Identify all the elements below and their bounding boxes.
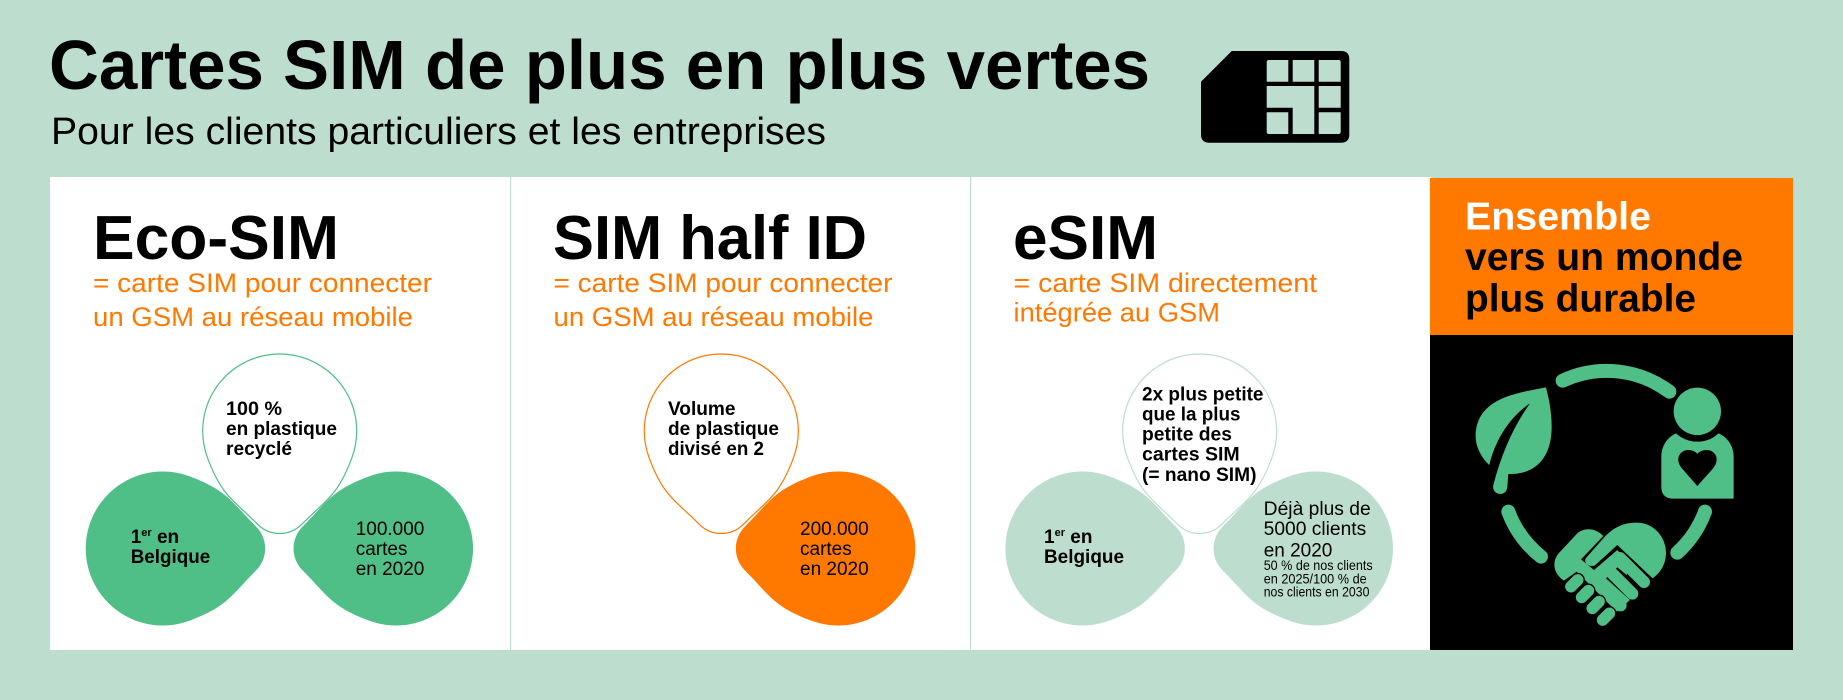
icon: handshake (1554, 523, 1666, 620)
drop: first in Belgium: er (141, 527, 152, 539)
drop: 5000 clients: 50 % de nos clients (1264, 557, 1373, 573)
drop: 100.000 cards: 100.000 (356, 519, 424, 540)
drop: 5000 clients: nos clients en 2030 (1264, 584, 1370, 600)
drop: 5000 clients: en 2020 (1264, 540, 1332, 562)
icon: person with heart (1661, 388, 1734, 499)
definition: SIM half ID (554, 268, 893, 332)
drop: first in Belgium: 1 (131, 527, 141, 548)
heading: eSIM: eSIM (1013, 204, 1158, 273)
drop: plastic volume (644, 354, 798, 533)
drop: first in Belgium (86, 472, 265, 626)
heading: SIM half ID: SIM half ID (553, 204, 867, 273)
drop: plastic volume: divisé en 2 (668, 439, 764, 460)
drop: smaller than nano SIM: que la plus (1142, 405, 1240, 426)
banner: together towards a more sustainable world: Ensemble (1465, 195, 1651, 238)
drop: first in Belgium: en (1065, 527, 1092, 548)
drop: recycled plastic (203, 354, 357, 533)
drop: 200.000 cards: en 2020 (800, 559, 869, 580)
banner: together towards a more sustainable world: plus durable (1465, 278, 1696, 321)
ring arcs (1508, 371, 1705, 557)
drop: smaller than nano SIM: petite des (1142, 425, 1232, 446)
banner: together towards a more sustainable world (1430, 178, 1793, 335)
panel: Ensemble (1430, 178, 1793, 650)
drop: 5000 clients (1214, 472, 1393, 626)
icon: SIM card (1201, 51, 1349, 143)
drop: 100.000 cards: cartes (356, 539, 407, 560)
heading: Eco-SIM: Eco-SIM (93, 204, 339, 273)
drop: recycled plastic: recyclé (226, 439, 292, 460)
drop: smaller than nano SIM: cartes SIM (1142, 445, 1240, 466)
drop: smaller than nano SIM: 2x plus petite (1142, 385, 1264, 406)
drop: first in Belgium: er (1055, 527, 1066, 539)
panel: eSIM (970, 177, 1431, 650)
definition: eSIM: intégrée au GSM (1014, 298, 1220, 328)
banner: together towards a more sustainable world: vers un monde (1465, 236, 1743, 279)
definition: SIM half ID: = carte SIM pour connecter (554, 268, 893, 298)
drop: 100.000 cards (294, 472, 473, 626)
icon: leaf, person and handshake ring (1476, 371, 1734, 620)
definition: SIM half ID: un GSM au réseau mobile (554, 302, 874, 332)
drop: 5000 clients: Déjà plus de (1264, 499, 1371, 520)
drop: 5000 clients: 5000 clients (1264, 519, 1366, 540)
definition: Eco-SIM: = carte SIM pour connecter (93, 268, 432, 298)
title: Cartes SIM de plus en plus vertes (49, 26, 1150, 104)
drop: first in Belgium: 1 (1044, 527, 1055, 548)
drop: 200.000 cards: cartes (800, 539, 852, 560)
drop: smaller than nano SIM (1123, 354, 1277, 533)
drop: first in Belgium: en (152, 527, 179, 548)
panel: SIM half ID (510, 177, 971, 650)
drop: first in Belgium: Belgique (131, 547, 210, 568)
drop: 200.000 cards (736, 472, 915, 626)
subtitle: Pour les clients particuliers et les entreprises (51, 111, 826, 153)
drop: 100.000 cards: en 2020 (356, 559, 424, 580)
drop: 200.000 cards: 200.000 (800, 519, 869, 540)
drop: recycled plastic: 100 % (226, 399, 282, 420)
drop: plastic volume: Volume (668, 399, 736, 420)
drop: 5000 clients: en 2025/100 % de (1264, 570, 1367, 586)
panel: Eco-SIM (50, 177, 511, 650)
drop: first in Belgium: Belgique (1044, 547, 1124, 568)
definition: Eco-SIM (93, 268, 432, 332)
icon: leaf (1476, 387, 1552, 494)
black icon background (1430, 335, 1793, 650)
drop: recycled plastic: en plastique (226, 419, 337, 440)
definition: eSIM (1014, 268, 1318, 328)
drop: plastic volume: de plastique (668, 419, 779, 440)
drop: smaller than nano SIM: (= nano SIM) (1142, 465, 1256, 486)
definition: Eco-SIM: un GSM au réseau mobile (93, 302, 413, 332)
definition: eSIM: = carte SIM directement (1014, 268, 1318, 298)
drop: first in Belgium (1005, 472, 1185, 626)
